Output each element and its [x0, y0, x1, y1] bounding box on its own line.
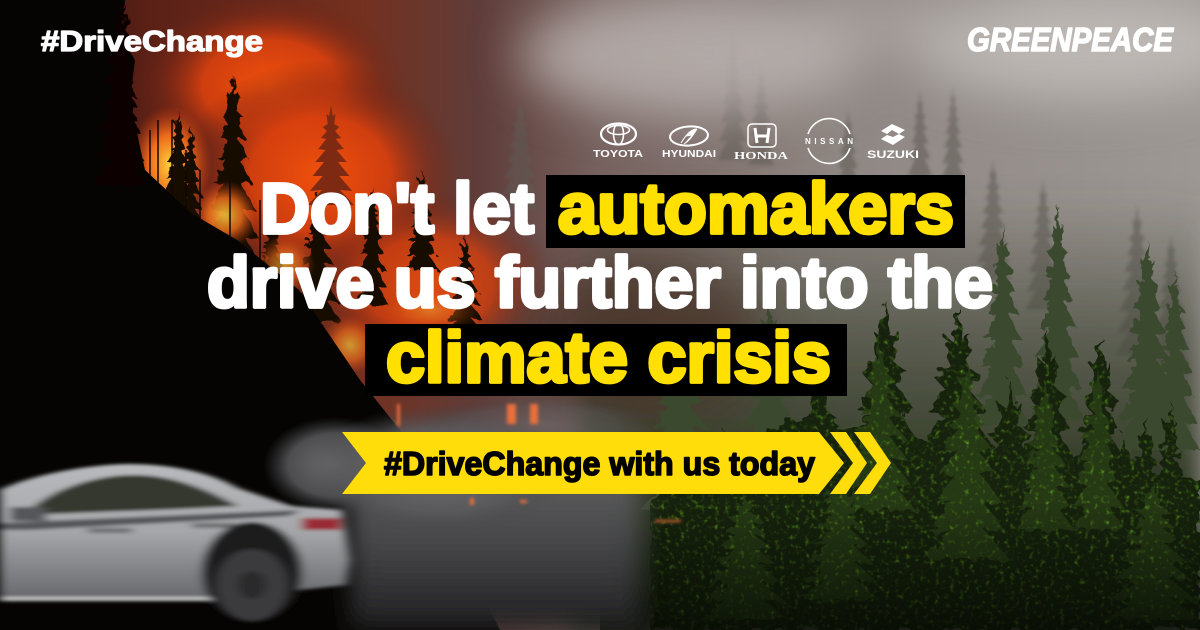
door handles — [88, 528, 132, 533]
car body — [0, 464, 350, 600]
left tree tops — [60, 0, 190, 200]
headline accent: automakers: automakers — [558, 170, 954, 249]
logo: Toyota — [593, 124, 643, 160]
automaker logos — [593, 119, 919, 163]
mid forest — [600, 200, 1200, 630]
lit foliage layer — [700, 340, 1200, 620]
logo: Suzuki — [867, 124, 919, 161]
headline line 1: Don't let — [260, 170, 534, 249]
headline accent: climate crisis: climate crisis — [386, 319, 831, 398]
distant foggy trees — [500, 30, 1190, 365]
logo: Honda — [734, 124, 788, 162]
car window — [25, 475, 238, 515]
logo: Hyundai — [662, 125, 716, 160]
logo: Nissan: NISSAN — [805, 137, 853, 146]
logo: Suzuki: SUZUKI — [867, 149, 919, 161]
beltline — [0, 510, 300, 530]
headline — [207, 170, 993, 398]
highlight box: climate crisis — [365, 324, 847, 396]
mid forest haze tone — [570, 190, 1200, 630]
fire glow — [135, 0, 555, 380]
call-to-action arrow banner — [342, 432, 891, 494]
dark hillside and dark forest at left — [0, 0, 500, 630]
burning tree silhouettes front — [100, 30, 280, 260]
highlight box: automakers — [546, 175, 965, 248]
exhaust smoke — [263, 397, 660, 630]
upper-right smoke — [520, 0, 1200, 115]
sill — [0, 597, 215, 601]
car: blurred silver sedan — [0, 464, 350, 622]
mirror — [10, 507, 46, 521]
tail light — [302, 518, 342, 530]
chevron 2 — [854, 432, 891, 494]
headline line 2: drive us further into the — [207, 244, 993, 323]
forest bottom shade — [600, 500, 1200, 630]
Greenpeace logo: GREENPEACE — [967, 21, 1174, 58]
trunk silhouettes — [150, 120, 260, 290]
hashtag top-left: #DriveChange — [41, 26, 263, 58]
embers — [397, 404, 681, 522]
smouldering centre tone — [520, 260, 760, 420]
banner label: #DriveChange with us today — [384, 445, 816, 482]
foreground pines — [650, 300, 1200, 630]
burning tree silhouettes — [0, 0, 520, 420]
logo: Honda: HONDA — [734, 150, 788, 162]
logo: Nissan — [805, 119, 853, 163]
logo: Toyota: TOYOTA — [593, 148, 643, 160]
flames — [128, 105, 480, 375]
chevron 1 — [830, 432, 867, 494]
logo: Hyundai: HYUNDAI — [662, 148, 716, 160]
red fir — [308, 105, 354, 205]
rear wheel — [202, 522, 302, 622]
